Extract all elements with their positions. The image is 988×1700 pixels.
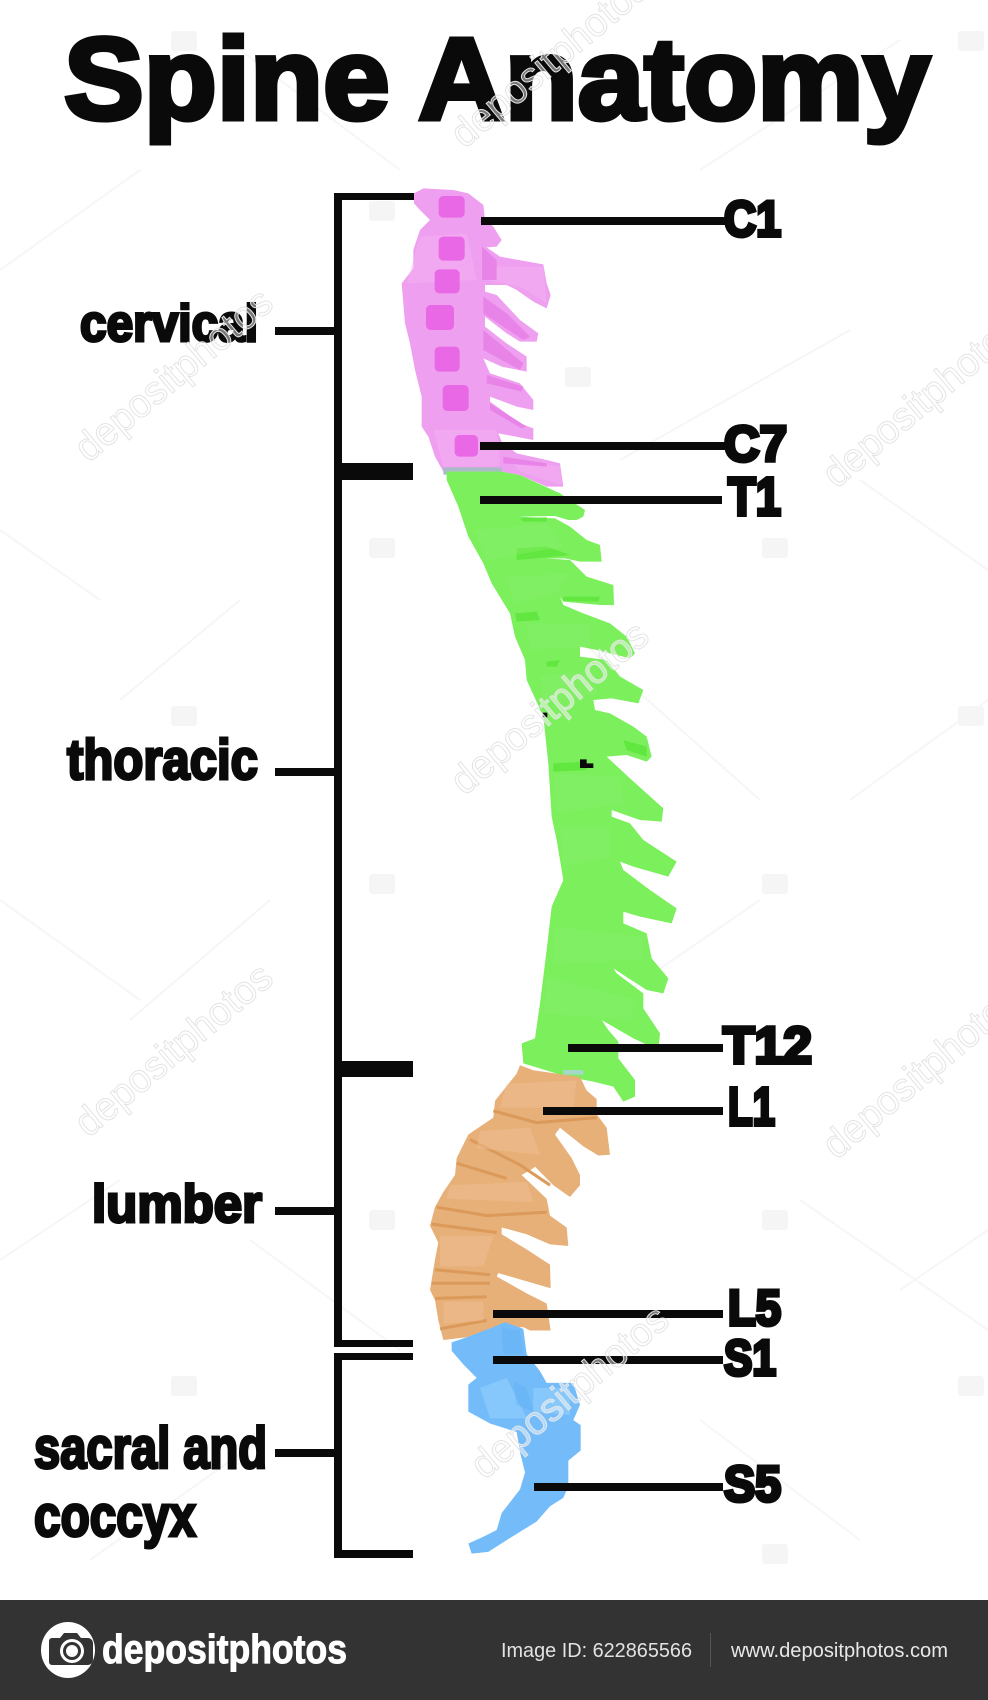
watermark layer: depositphotos: [462, 1297, 677, 1487]
label: lumber: lumber: [92, 1175, 262, 1234]
bracket: spine regions: [275, 193, 414, 1558]
icon: camera logo: [41, 1622, 95, 1678]
watermark layer: depositphotos: [66, 280, 281, 470]
callout: T1: [480, 467, 781, 527]
label: sacral and coccyx: [34, 1416, 267, 1549]
callout: S5: [534, 1456, 781, 1512]
label: sacral and coccyx: coccyx: [34, 1484, 196, 1549]
label: sacral and coccyx: sacral and: [34, 1416, 267, 1481]
callout: C7: [480, 416, 787, 472]
callout: C1: C1: [724, 191, 781, 247]
callout: L5: [493, 1280, 781, 1336]
callout: S1: S1: [724, 1330, 776, 1386]
footer brand name: depositphotos: [102, 1626, 347, 1672]
callout: T12: T12: [723, 1017, 812, 1075]
callout: T1: T1: [728, 467, 781, 527]
callout: L5: L5: [728, 1280, 781, 1336]
footer image id: Image ID: 622865566: [501, 1640, 692, 1662]
callout: C1: [481, 191, 781, 247]
callout: L1: [543, 1077, 775, 1137]
title: Spine Anatomy: [64, 14, 930, 144]
callout: C7: C7: [724, 416, 787, 472]
spine: sacrum and coccyx: [452, 1322, 581, 1554]
callout: T12: [568, 1017, 812, 1075]
spine: thoracic vertebrae: [447, 472, 677, 1102]
spine: cervical vertebrae: [402, 188, 563, 487]
callout: S5: S5: [724, 1456, 781, 1512]
vertebral foramen markers: [426, 196, 478, 457]
callout: L1: L1: [728, 1077, 775, 1137]
label: thoracic: thoracic: [67, 728, 258, 792]
watermark layer: depositphotos: [442, 613, 657, 803]
footer bar: [0, 1600, 988, 1700]
callout: S1: [493, 1330, 776, 1386]
label: cervical: cervical: [80, 295, 258, 353]
spine: lumbar vertebrae: [430, 1065, 610, 1340]
watermark layer: depositphotos: [66, 955, 281, 1145]
footer url: www.depositphotos.com: [730, 1640, 948, 1662]
stray pixels: [543, 713, 593, 768]
